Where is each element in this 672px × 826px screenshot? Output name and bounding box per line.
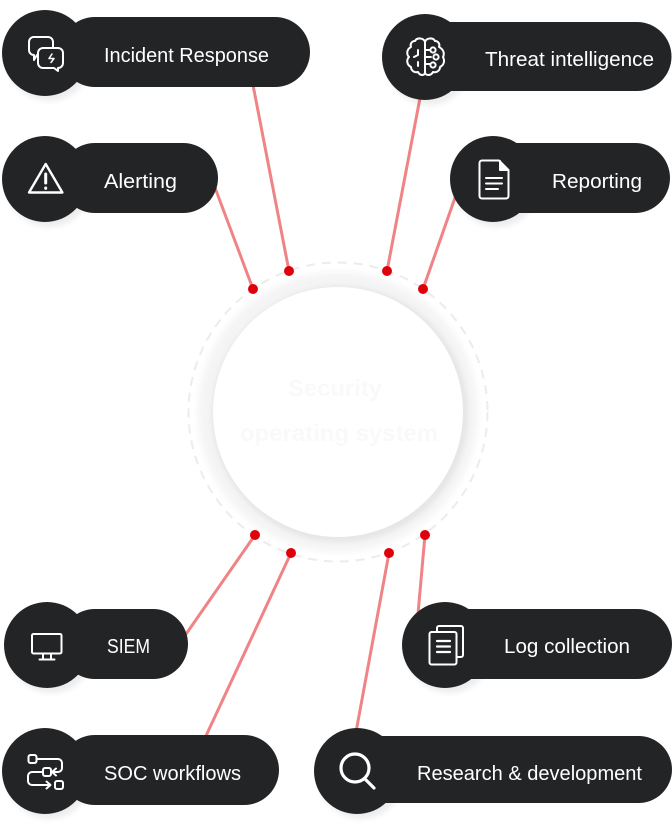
pill: Alerting: [2, 136, 218, 227]
label: SOC workflows: [104, 763, 241, 785]
label: Incident Response: [104, 45, 269, 67]
central circle: [188, 262, 488, 562]
icon: document: [480, 160, 508, 198]
center title: operating system: [240, 420, 438, 446]
pill: Incident Response: [2, 10, 310, 101]
icon: magnifying glass: [341, 754, 374, 788]
pill: SIEM: [4, 602, 188, 693]
connector dots: [248, 266, 430, 558]
label: Reporting: [552, 171, 642, 193]
connector lines: [184, 85, 457, 738]
label: Alerting: [104, 171, 177, 193]
icon: brain: [407, 38, 444, 75]
center title: Security: [288, 375, 382, 401]
pill: Threat intelligence: [382, 14, 672, 105]
icon: warning triangle: [29, 164, 62, 192]
icon: stacked documents: [430, 626, 463, 664]
icon: workflow: [28, 755, 63, 789]
label: Log collection: [504, 636, 630, 658]
label: Research & development: [417, 763, 642, 785]
icon: monitor: [32, 634, 62, 660]
icon: chat bubbles: [29, 37, 63, 71]
pill: Log collection: [402, 602, 672, 693]
center title: [240, 375, 438, 446]
label: SIEM: [107, 636, 150, 658]
pill: Reporting: [450, 136, 670, 227]
pill: SOC workflows: [2, 728, 279, 819]
pill: Research & development: [314, 728, 672, 819]
label: Threat intelligence: [485, 49, 654, 71]
